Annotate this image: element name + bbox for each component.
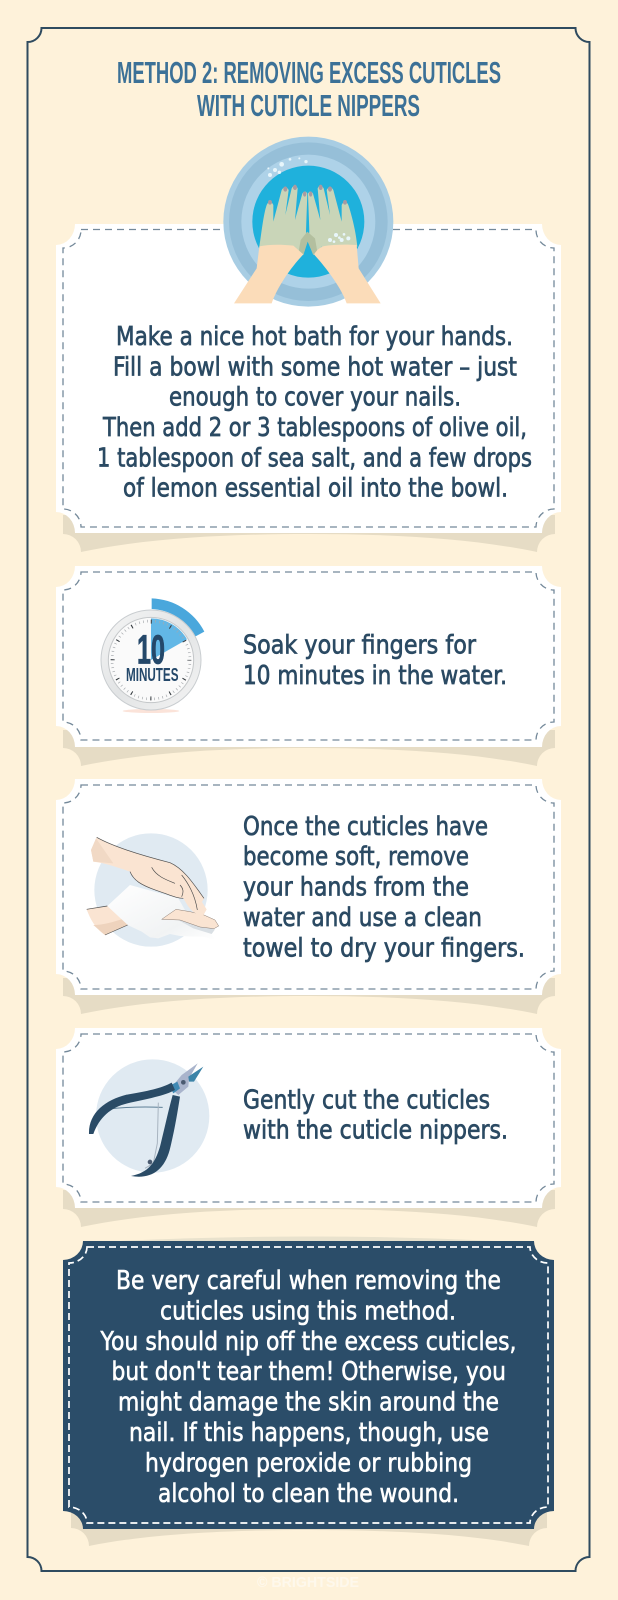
text: cut bbox=[243, 1085, 508, 1145]
text: bath instructions: Make a nice hot bath for your hands. bbox=[116, 322, 513, 352]
text: warning: You should nip off the excess cuticles, bbox=[100, 1327, 516, 1357]
text: warning: hydrogen peroxide or rubbing bbox=[145, 1448, 472, 1478]
icon: 10 minute stopwatch bbox=[101, 598, 204, 713]
panel: soak timer bbox=[56, 566, 561, 766]
panel: warning bbox=[63, 1236, 554, 1546]
text: soak: Soak your fingers for bbox=[243, 630, 476, 660]
text: cut: Gently cut the cuticles bbox=[243, 1085, 490, 1115]
icon: cuticle nippers bbox=[89, 1059, 209, 1177]
text: warning: cuticles using this method. bbox=[160, 1296, 456, 1326]
title: WITH CUTICLE NIPPERS bbox=[197, 89, 420, 123]
panel: cut cuticles bbox=[56, 1028, 561, 1227]
text: cut: with the cuticle nippers. bbox=[243, 1115, 508, 1145]
text: dry: become soft, remove bbox=[243, 842, 469, 872]
panel: dry hands bbox=[56, 779, 561, 1014]
text: warning: but don't tear them! Otherwise, you bbox=[112, 1357, 506, 1387]
credit: © BRIGHTSIDE bbox=[257, 1574, 359, 1591]
text: bath instructions: Then add 2 or 3 tablespoons of olive oil, bbox=[102, 413, 527, 443]
text: soak bbox=[243, 630, 507, 691]
text: bath instructions: Fill a bowl with some hot water – just bbox=[113, 353, 517, 383]
icon: hands in bowl bbox=[223, 137, 393, 307]
text: warning: might damage the skin around the bbox=[118, 1388, 499, 1418]
text: soak: 10 minutes in the water. bbox=[243, 661, 507, 691]
icon: 10 minute stopwatch: 10 bbox=[137, 626, 165, 672]
icon: 10 minute stopwatch: MINUTES bbox=[126, 664, 178, 685]
title bbox=[117, 56, 501, 123]
text: bath instructions: of lemon essential oil into the bowl. bbox=[123, 474, 508, 504]
text: bath instructions: enough to cover your nails. bbox=[169, 383, 461, 413]
text: dry: water and use a clean bbox=[243, 903, 482, 933]
text: warning: alcohol to clean the wound. bbox=[158, 1479, 459, 1509]
text: dry: your hands from the bbox=[243, 873, 469, 903]
icon: hands drying with towel bbox=[87, 833, 219, 947]
text: dry bbox=[243, 812, 525, 964]
text: warning: nail. If this happens, though, use bbox=[129, 1418, 489, 1448]
text: warning bbox=[100, 1266, 516, 1509]
text: dry: Once the cuticles have bbox=[243, 812, 488, 842]
text: dry: towel to dry your fingers. bbox=[243, 934, 525, 964]
text: bath instructions bbox=[97, 322, 532, 504]
text: warning: Be very careful when removing the bbox=[116, 1266, 501, 1296]
text: bath instructions: 1 tablespoon of sea salt, and a few drops bbox=[97, 444, 532, 474]
panel: hot bath bbox=[56, 137, 561, 552]
